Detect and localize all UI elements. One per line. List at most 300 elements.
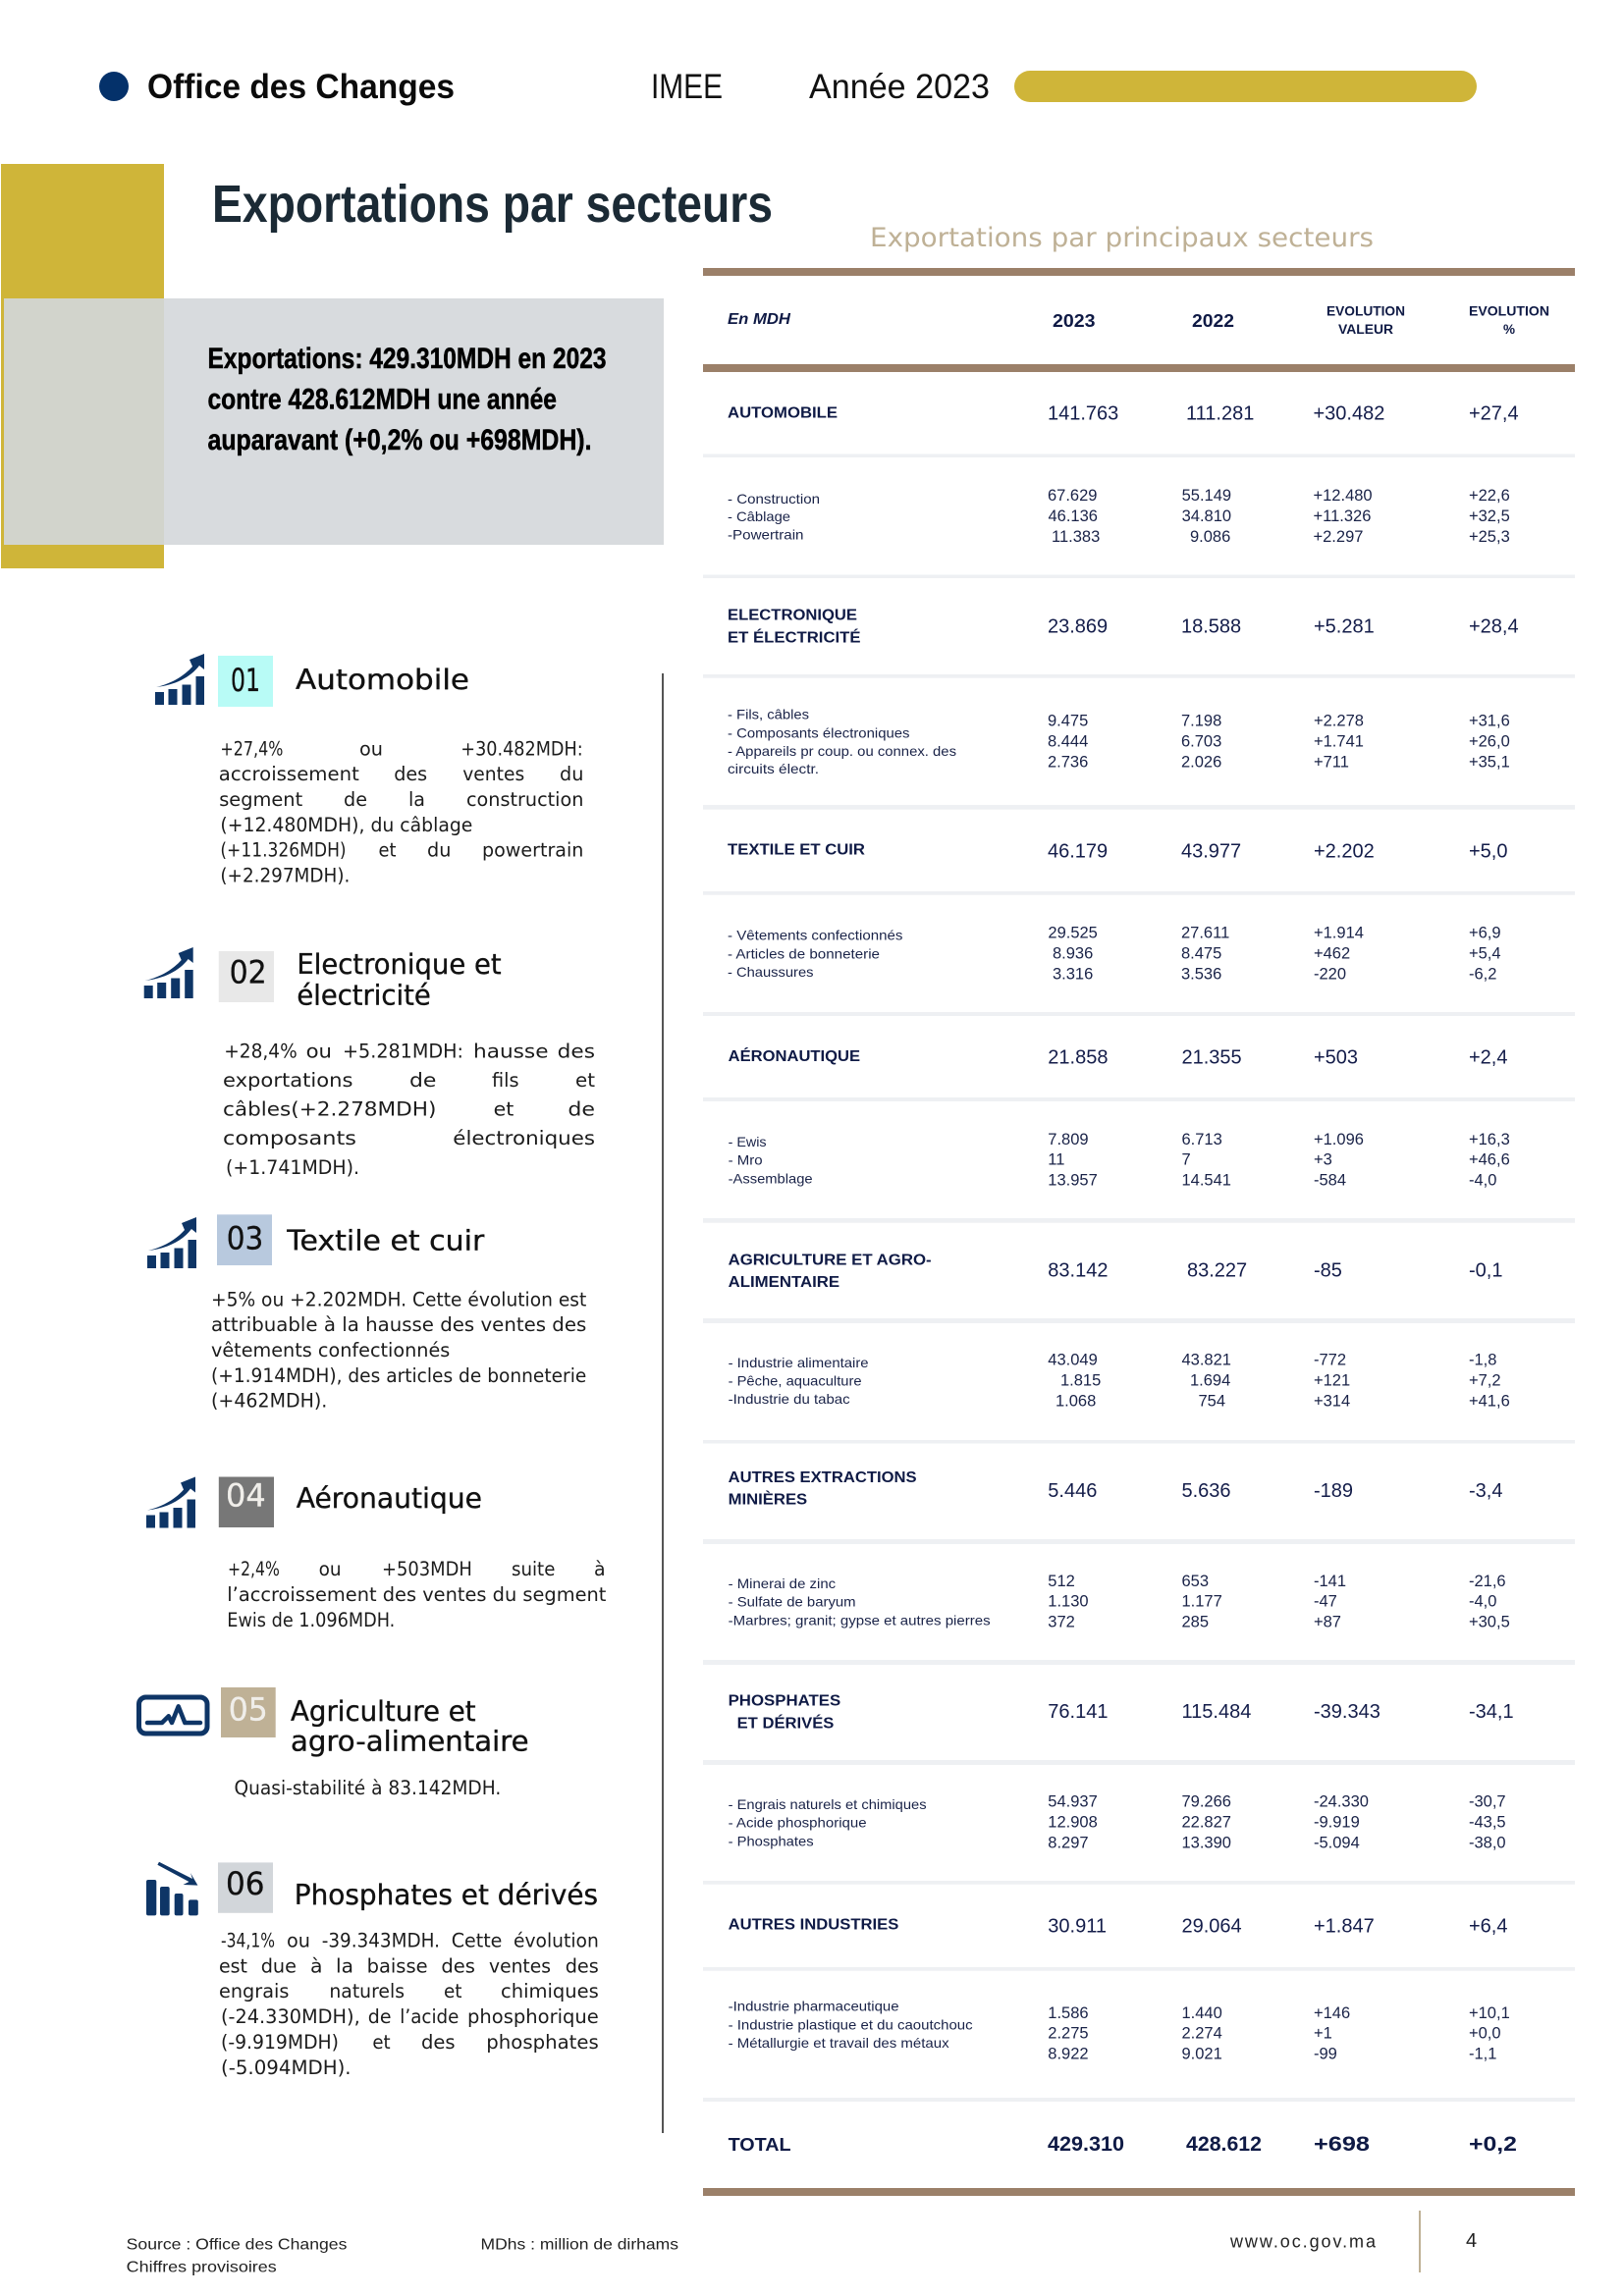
row: aeronautique details: 7 xyxy=(1182,1151,1191,1169)
row: autres industries details: 1.440 xyxy=(1182,2004,1222,2022)
row: textile details: -6,2 xyxy=(1469,965,1496,983)
body text: ou xyxy=(319,1558,342,1580)
number badge 03 xyxy=(217,1214,272,1265)
number badge 05 xyxy=(221,1687,276,1737)
row: automobile xyxy=(728,402,1519,424)
panel: sector 03 textile xyxy=(147,1214,587,1413)
row: textile details: 8.475 xyxy=(1181,945,1221,963)
row: autres industries: 29.064 xyxy=(1182,1915,1242,1937)
body text: baisse xyxy=(367,1955,428,1977)
row: textile details: +1.914 xyxy=(1314,925,1364,942)
row: agriculture: -0,1 xyxy=(1469,1259,1502,1281)
row: textile: 46.179 xyxy=(1048,840,1108,862)
brand name: Office des Changes xyxy=(147,68,455,106)
row: phosphates: 115.484 xyxy=(1182,1701,1251,1723)
row: electronique details: 9.475 xyxy=(1048,712,1088,729)
body text: à xyxy=(594,1558,606,1580)
heading: Aéronautique xyxy=(297,1482,482,1515)
row: aeronautique details: -Assemblage xyxy=(729,1170,813,1186)
row: autres extractions details: 1.177 xyxy=(1182,1593,1222,1611)
heading: Electronique et xyxy=(297,948,502,981)
row: autres industries: +6,4 xyxy=(1469,1915,1507,1937)
body text: et xyxy=(494,1098,514,1121)
row: aeronautique xyxy=(729,1046,1507,1068)
body text: ventes xyxy=(462,763,524,785)
heading: électricité xyxy=(297,980,431,1011)
heading: Textile et cuir xyxy=(286,1224,485,1256)
summary text: contre 428.612MDH une année xyxy=(208,383,557,416)
body text: la xyxy=(336,1955,353,1977)
body text: l’acide xyxy=(400,2005,459,2028)
row: aeronautique details: 6.713 xyxy=(1182,1131,1222,1148)
row: autres industries details: - Métallurgie et travail des métaux xyxy=(729,2035,949,2051)
row: textile details: - Chaussures xyxy=(728,964,813,980)
row: autres extractions details: 1.130 xyxy=(1048,1593,1089,1611)
row: automobile details: 55.149 xyxy=(1182,487,1231,505)
row: agriculture details: 43.049 xyxy=(1048,1352,1098,1369)
row: automobile: +30.482 xyxy=(1314,402,1384,424)
row: textile details xyxy=(728,925,1501,983)
row: autres extractions: -189 xyxy=(1314,1480,1353,1502)
header bar xyxy=(99,68,1477,106)
summary text: auparavant (+0,2% ou +698MDH). xyxy=(208,424,591,456)
row: electronique xyxy=(728,608,1519,646)
body text: (-5.094MDH). xyxy=(221,2056,352,2079)
heading: agro-alimentaire xyxy=(291,1726,529,1758)
unit note: MDhs : million de dirhams xyxy=(481,2237,678,2254)
body text: due xyxy=(261,1955,297,1977)
body text: exportations xyxy=(223,1069,353,1092)
heading: Automobile xyxy=(296,664,469,696)
row: automobile: 111.281 xyxy=(1186,402,1254,424)
body text: +5.281MDH: xyxy=(343,1040,463,1062)
row: autres industries xyxy=(729,1915,1507,1937)
row: aeronautique: 21.355 xyxy=(1182,1046,1242,1068)
row: phosphates details: 22.827 xyxy=(1182,1814,1231,1832)
table header row: 2023 xyxy=(1053,310,1096,331)
icon: rising bars xyxy=(146,1476,195,1527)
row: textile: 43.977 xyxy=(1181,840,1241,862)
row: phosphates: -34,1 xyxy=(1469,1701,1514,1723)
heading: Agriculture et xyxy=(291,1695,476,1728)
row: electronique details: 7.198 xyxy=(1181,712,1221,729)
row: phosphates details: -9.919 xyxy=(1314,1814,1360,1832)
row: autres extractions: AUTRES EXTRACTIONS xyxy=(729,1469,917,1486)
body text: (+1.741MDH). xyxy=(226,1156,359,1179)
row: textile details: 3.536 xyxy=(1181,965,1221,983)
row: automobile details: +32,5 xyxy=(1469,507,1510,525)
row: autres industries: +1.847 xyxy=(1314,1915,1375,1937)
row: agriculture xyxy=(729,1252,1502,1291)
table subtitle: Exportations par principaux secteurs xyxy=(870,223,1374,253)
row: automobile details: 46.136 xyxy=(1049,507,1098,525)
row: aeronautique details: 14.541 xyxy=(1182,1172,1231,1190)
row: textile details: 8.936 xyxy=(1053,945,1093,963)
row: phosphates details: - Phosphates xyxy=(729,1833,814,1848)
row: autres extractions: 5.446 xyxy=(1048,1480,1097,1502)
row: phosphates details: 13.390 xyxy=(1182,1835,1231,1852)
icon: rising bars xyxy=(147,1217,196,1268)
source note: Chiffres provisoires xyxy=(127,2259,277,2275)
body text xyxy=(227,1558,607,1631)
body text: et xyxy=(575,1069,595,1092)
body text: de xyxy=(344,788,367,811)
body text: électroniques xyxy=(453,1127,595,1149)
icon: header dot xyxy=(99,72,129,101)
gold pill xyxy=(1014,71,1477,102)
row: automobile details: +12.480 xyxy=(1314,487,1373,505)
panel: sector 05 agriculture xyxy=(139,1687,529,1799)
panel: sector 01 automobile xyxy=(155,654,583,887)
panel: sector 06 phosphates xyxy=(146,1862,599,2079)
body text: câbles(+2.278MDH) xyxy=(223,1098,436,1121)
row: autres extractions details: 285 xyxy=(1182,1614,1209,1631)
row: automobile: +27,4 xyxy=(1469,402,1519,424)
row: autres industries details xyxy=(729,1999,1510,2063)
gold accent block xyxy=(1,164,164,568)
row: autres extractions details: - Sulfate de baryum xyxy=(729,1594,856,1610)
body text: ou xyxy=(359,737,383,760)
row: textile details: - Vêtements confectionnés xyxy=(728,928,902,943)
number badge 03: 03 xyxy=(227,1220,263,1257)
row: agriculture details: -1,8 xyxy=(1469,1352,1496,1369)
body text: la xyxy=(408,788,425,811)
row: autres extractions details: 372 xyxy=(1048,1614,1075,1631)
body text: ou xyxy=(287,1930,310,1952)
row: electronique details: +711 xyxy=(1314,753,1349,771)
row: textile details: 29.525 xyxy=(1048,925,1098,942)
panel: sector 02 electronique xyxy=(144,947,595,1179)
row: autres extractions xyxy=(729,1469,1502,1509)
row: automobile details xyxy=(728,487,1510,546)
row: phosphates: ET DÉRIVÉS xyxy=(737,1716,834,1733)
body text: vêtements confectionnés xyxy=(211,1339,450,1362)
row: electronique details: 2.736 xyxy=(1048,753,1088,771)
row: aeronautique details: - Ewis xyxy=(729,1134,767,1149)
body text: engrais xyxy=(219,1980,289,2002)
body text: et xyxy=(379,839,397,862)
row: electronique: +28,4 xyxy=(1469,615,1519,637)
row: phosphates: -39.343 xyxy=(1314,1701,1380,1723)
row: electronique: ELECTRONIQUE xyxy=(728,608,857,624)
row: automobile details: +11.326 xyxy=(1314,507,1371,525)
row: textile details: - Articles de bonneterie xyxy=(728,945,880,961)
row: aeronautique details xyxy=(729,1131,1510,1190)
row: aeronautique details: 11 xyxy=(1048,1151,1064,1169)
body text: suite xyxy=(512,1558,555,1580)
body text xyxy=(223,1040,595,1179)
number badge 02: 02 xyxy=(230,954,267,991)
row: total xyxy=(729,2133,1517,2156)
body text: hausse xyxy=(473,1040,548,1062)
row: electronique details: +26,0 xyxy=(1469,732,1510,750)
row: agriculture details: 43.821 xyxy=(1182,1352,1231,1369)
row: aeronautique: 21.858 xyxy=(1048,1046,1108,1068)
row: autres industries details: 1.586 xyxy=(1048,2004,1089,2022)
row: textile: +2.202 xyxy=(1314,840,1375,862)
body text: composants xyxy=(223,1127,356,1149)
row: electronique details xyxy=(728,707,1510,776)
row: autres extractions: MINIÈRES xyxy=(729,1492,807,1509)
number badge 02 xyxy=(219,951,274,1002)
number badge 01 xyxy=(218,656,273,707)
heading xyxy=(297,948,502,1011)
body text: +2,4% xyxy=(228,1558,280,1580)
row: phosphates details: - Acide phosphorique xyxy=(729,1815,867,1831)
row: textile: +5,0 xyxy=(1469,840,1507,862)
row: autres industries details: 9.021 xyxy=(1182,2046,1222,2063)
row: aeronautique details: +16,3 xyxy=(1469,1131,1510,1148)
row: autres extractions: -3,4 xyxy=(1469,1480,1502,1502)
row: phosphates: 76.141 xyxy=(1048,1701,1108,1723)
table header row: VALEUR xyxy=(1338,322,1393,337)
body text: l’accroissement des ventes du segment xyxy=(227,1583,607,1606)
report name: IMEE xyxy=(651,68,723,106)
row: autres extractions details: -Marbres; granit; gypse et autres pierres xyxy=(729,1612,991,1628)
row: textile details: 27.611 xyxy=(1181,925,1229,942)
row: aeronautique details: +46,6 xyxy=(1469,1151,1510,1169)
body text: évolution xyxy=(514,1930,599,1952)
row: phosphates details: -38,0 xyxy=(1469,1835,1506,1852)
row: agriculture details: - Industrie alimentaire xyxy=(729,1355,869,1370)
table header row: 2022 xyxy=(1192,310,1234,331)
row: aeronautique details: - Mro xyxy=(729,1152,763,1168)
row: phosphates details: -43,5 xyxy=(1469,1814,1506,1832)
source note xyxy=(127,2237,347,2275)
row: agriculture: -85 xyxy=(1314,1259,1342,1281)
panel: summary box xyxy=(4,298,664,545)
body text: (-9.919MDH) xyxy=(221,2031,339,2054)
row: autres industries details: 2.274 xyxy=(1182,2025,1222,2043)
row: autres extractions details xyxy=(729,1573,1510,1631)
body text: fils xyxy=(492,1069,519,1092)
row: aeronautique: AÉRONAUTIQUE xyxy=(729,1048,860,1065)
body text: accroissement xyxy=(219,763,359,785)
body text: ventes xyxy=(489,1955,551,1977)
row: aeronautique: +503 xyxy=(1314,1046,1358,1068)
body text: Ewis de 1.096MDH. xyxy=(227,1609,395,1631)
row: phosphates details: -30,7 xyxy=(1469,1793,1506,1811)
row: autres industries details: +10,1 xyxy=(1469,2004,1510,2022)
body text: (+12.480MDH), du câblage xyxy=(220,814,472,836)
row: automobile: 141.763 xyxy=(1048,402,1118,424)
row: total: TOTAL xyxy=(729,2135,791,2155)
row: autres extractions details: +87 xyxy=(1314,1614,1341,1631)
row: phosphates details xyxy=(729,1793,1506,1852)
row: textile details: +6,9 xyxy=(1469,925,1501,942)
row: agriculture: AGRICULTURE ET AGRO- xyxy=(729,1252,932,1268)
row: autres industries details: - Industrie plastique et du caoutchouc xyxy=(729,2016,973,2032)
row: automobile details: 34.810 xyxy=(1182,507,1231,525)
body text: (+11.326MDH) xyxy=(220,839,347,862)
body text: +30.482MDH: xyxy=(460,737,583,760)
row: textile xyxy=(728,840,1507,862)
row: agriculture details: 1.815 xyxy=(1060,1372,1101,1390)
row: agriculture details: +7,2 xyxy=(1469,1372,1501,1390)
row: automobile details: - Construction xyxy=(728,491,820,507)
row: textile details: +462 xyxy=(1314,945,1350,963)
row: electronique: 23.869 xyxy=(1048,615,1108,637)
row: electronique details: +1.741 xyxy=(1314,732,1364,750)
body text: des xyxy=(566,1955,599,1977)
source note: Source : Office des Changes xyxy=(127,2237,347,2254)
row: electronique: +5.281 xyxy=(1314,615,1375,637)
icon: rising bars xyxy=(155,654,204,705)
body text: des xyxy=(421,2031,456,2054)
body text: (+1.914MDH), des articles de bonneterie xyxy=(211,1364,586,1387)
row: agriculture details: +121 xyxy=(1314,1372,1350,1390)
body text xyxy=(219,737,583,887)
row: autres industries details: +1 xyxy=(1314,2025,1332,2043)
row: automobile details: -Powertrain xyxy=(728,527,803,543)
number badge 06: 06 xyxy=(226,1865,265,1902)
row: agriculture details: -Industrie du tabac xyxy=(729,1391,850,1407)
row: autres extractions details: -21,6 xyxy=(1469,1573,1506,1590)
row: electronique details: 8.444 xyxy=(1048,732,1088,750)
row: agriculture details: 1.694 xyxy=(1190,1372,1230,1390)
body text: et xyxy=(372,2031,391,2054)
table header row xyxy=(728,304,1549,337)
row: agriculture details: +41,6 xyxy=(1469,1392,1510,1410)
body text: +5% ou +2.202MDH. Cette évolution est xyxy=(211,1288,587,1310)
row: aeronautique details: +3 xyxy=(1314,1151,1332,1169)
body text: et xyxy=(444,1980,462,2002)
row: electronique details: - Appareils pr coup. ou connex. des xyxy=(728,743,956,759)
row: automobile details: 11.383 xyxy=(1052,528,1100,546)
row: phosphates details: - Engrais naturels et chimiques xyxy=(729,1796,927,1812)
body text: des xyxy=(394,763,427,785)
body text: de xyxy=(568,1098,595,1121)
row: agriculture details: +314 xyxy=(1314,1392,1350,1410)
number badge 01: 01 xyxy=(231,662,260,699)
body text: powertrain xyxy=(482,839,583,862)
number badge 04: 04 xyxy=(226,1476,266,1514)
row: electronique: 18.588 xyxy=(1181,615,1241,637)
icon: falling bars xyxy=(146,1862,198,1915)
body text: du xyxy=(427,839,451,862)
row: autres industries details: -99 xyxy=(1314,2046,1337,2063)
row: autres industries details: +0,0 xyxy=(1469,2025,1501,2043)
body text: (+462MDH). xyxy=(211,1390,327,1413)
row: agriculture details xyxy=(729,1352,1510,1410)
row: agriculture details: - Pêche, aquaculture xyxy=(729,1373,862,1389)
row: aeronautique details: -584 xyxy=(1314,1172,1346,1190)
row: electronique details: circuits électr. xyxy=(728,761,819,776)
row: phosphates: PHOSPHATES xyxy=(729,1693,840,1710)
body text: construction xyxy=(466,788,583,811)
body text xyxy=(219,1930,599,2079)
body text: naturels xyxy=(329,1980,405,2002)
row: phosphates details: 12.908 xyxy=(1048,1814,1098,1832)
body text: phosphorique xyxy=(467,2005,599,2028)
row: phosphates details: -24.330 xyxy=(1314,1793,1369,1811)
body text: chimiques xyxy=(501,1980,599,2002)
footer divider xyxy=(1419,2211,1421,2272)
row: autres extractions details: -47 xyxy=(1314,1593,1337,1611)
summary text xyxy=(208,343,607,456)
summary text: Exportations: 429.310MDH en 2023 xyxy=(208,343,607,375)
page title: Exportations par secteurs xyxy=(212,175,773,234)
row: phosphates details: -5.094 xyxy=(1314,1835,1360,1852)
row: autres extractions details: -141 xyxy=(1314,1573,1346,1590)
row: aeronautique details: 7.809 xyxy=(1048,1131,1089,1148)
row: electronique: ET ÉLECTRICITÉ xyxy=(728,629,860,646)
heading: Phosphates et dérivés xyxy=(295,1879,598,1911)
vertical divider xyxy=(662,673,664,2133)
body text: à xyxy=(310,1955,322,1977)
row: automobile details: +2.297 xyxy=(1314,528,1363,546)
row: autres industries: AUTRES INDUSTRIES xyxy=(729,1917,898,1934)
row: total: 429.310 xyxy=(1048,2133,1124,2156)
row: agriculture details: 754 xyxy=(1198,1392,1225,1410)
table: exports by sector xyxy=(703,268,1575,2196)
row: total: +698 xyxy=(1314,2133,1370,2156)
row: autres industries details: 2.275 xyxy=(1048,2025,1089,2043)
body text: -39.343MDH. xyxy=(322,1930,440,1952)
body text: +28,4% xyxy=(224,1040,298,1062)
row: agriculture: 83.142 xyxy=(1048,1259,1108,1281)
body text: attribuable à la hausse des ventes des xyxy=(211,1313,586,1336)
row: electronique details: +31,6 xyxy=(1469,712,1510,729)
row: textile details: +5,4 xyxy=(1469,945,1501,963)
row: aeronautique details: +1.096 xyxy=(1314,1131,1364,1148)
number badge 05: 05 xyxy=(229,1691,268,1729)
table header row: En MDH xyxy=(728,311,791,328)
table header row: EVOLUTION xyxy=(1326,304,1405,318)
table header row: EVOLUTION xyxy=(1469,304,1549,318)
row: autres extractions details: 512 xyxy=(1048,1573,1075,1590)
row: electronique details: +35,1 xyxy=(1469,753,1510,771)
row: textile: TEXTILE ET CUIR xyxy=(728,842,865,859)
body text: du xyxy=(560,763,583,785)
row: agriculture: ALIMENTAIRE xyxy=(729,1274,839,1291)
row: agriculture details: -772 xyxy=(1314,1352,1346,1369)
row: autres industries details: -Industrie pharmaceutique xyxy=(729,1999,899,2014)
row: aeronautique details: -4,0 xyxy=(1469,1172,1496,1190)
body text: +503MDH xyxy=(382,1558,472,1580)
row: total: 428.612 xyxy=(1186,2133,1262,2156)
number badge 06 xyxy=(218,1862,273,1913)
row: electronique details: - Composants électroniques xyxy=(728,724,909,740)
footer xyxy=(127,2211,1477,2275)
body text: est xyxy=(219,1955,247,1977)
row: electronique details: - Fils, câbles xyxy=(728,707,809,722)
row: autres industries details: -1,1 xyxy=(1469,2046,1496,2063)
row: automobile details: 67.629 xyxy=(1048,487,1097,505)
row: autres industries details: 8.922 xyxy=(1048,2046,1089,2063)
row: aeronautique: +2,4 xyxy=(1469,1046,1507,1068)
table header row: % xyxy=(1503,322,1515,337)
row: automobile details: +22,6 xyxy=(1469,487,1510,505)
row: autres extractions details: - Minerai de zinc xyxy=(729,1575,836,1591)
row: automobile: AUTOMOBILE xyxy=(728,404,838,422)
body text: (-24.330MDH), xyxy=(221,2005,360,2028)
row: autres extractions details: 653 xyxy=(1182,1573,1209,1590)
body text: -34,1% xyxy=(221,1930,275,1952)
row: autres industries: 30.911 xyxy=(1048,1915,1107,1937)
body text xyxy=(211,1288,587,1413)
body text: Cette xyxy=(452,1930,502,1952)
row: agriculture: 83.227 xyxy=(1187,1259,1247,1281)
row: total: +0,2 xyxy=(1469,2133,1517,2156)
row: phosphates details: 54.937 xyxy=(1048,1793,1098,1811)
icon: stable pulse monitor xyxy=(139,1697,207,1734)
report year: Année 2023 xyxy=(809,68,990,106)
row: textile details: -220 xyxy=(1314,965,1346,983)
body text: de xyxy=(409,1069,436,1092)
row: electronique details: +2.278 xyxy=(1314,712,1364,729)
row: automobile details: 9.086 xyxy=(1190,528,1230,546)
